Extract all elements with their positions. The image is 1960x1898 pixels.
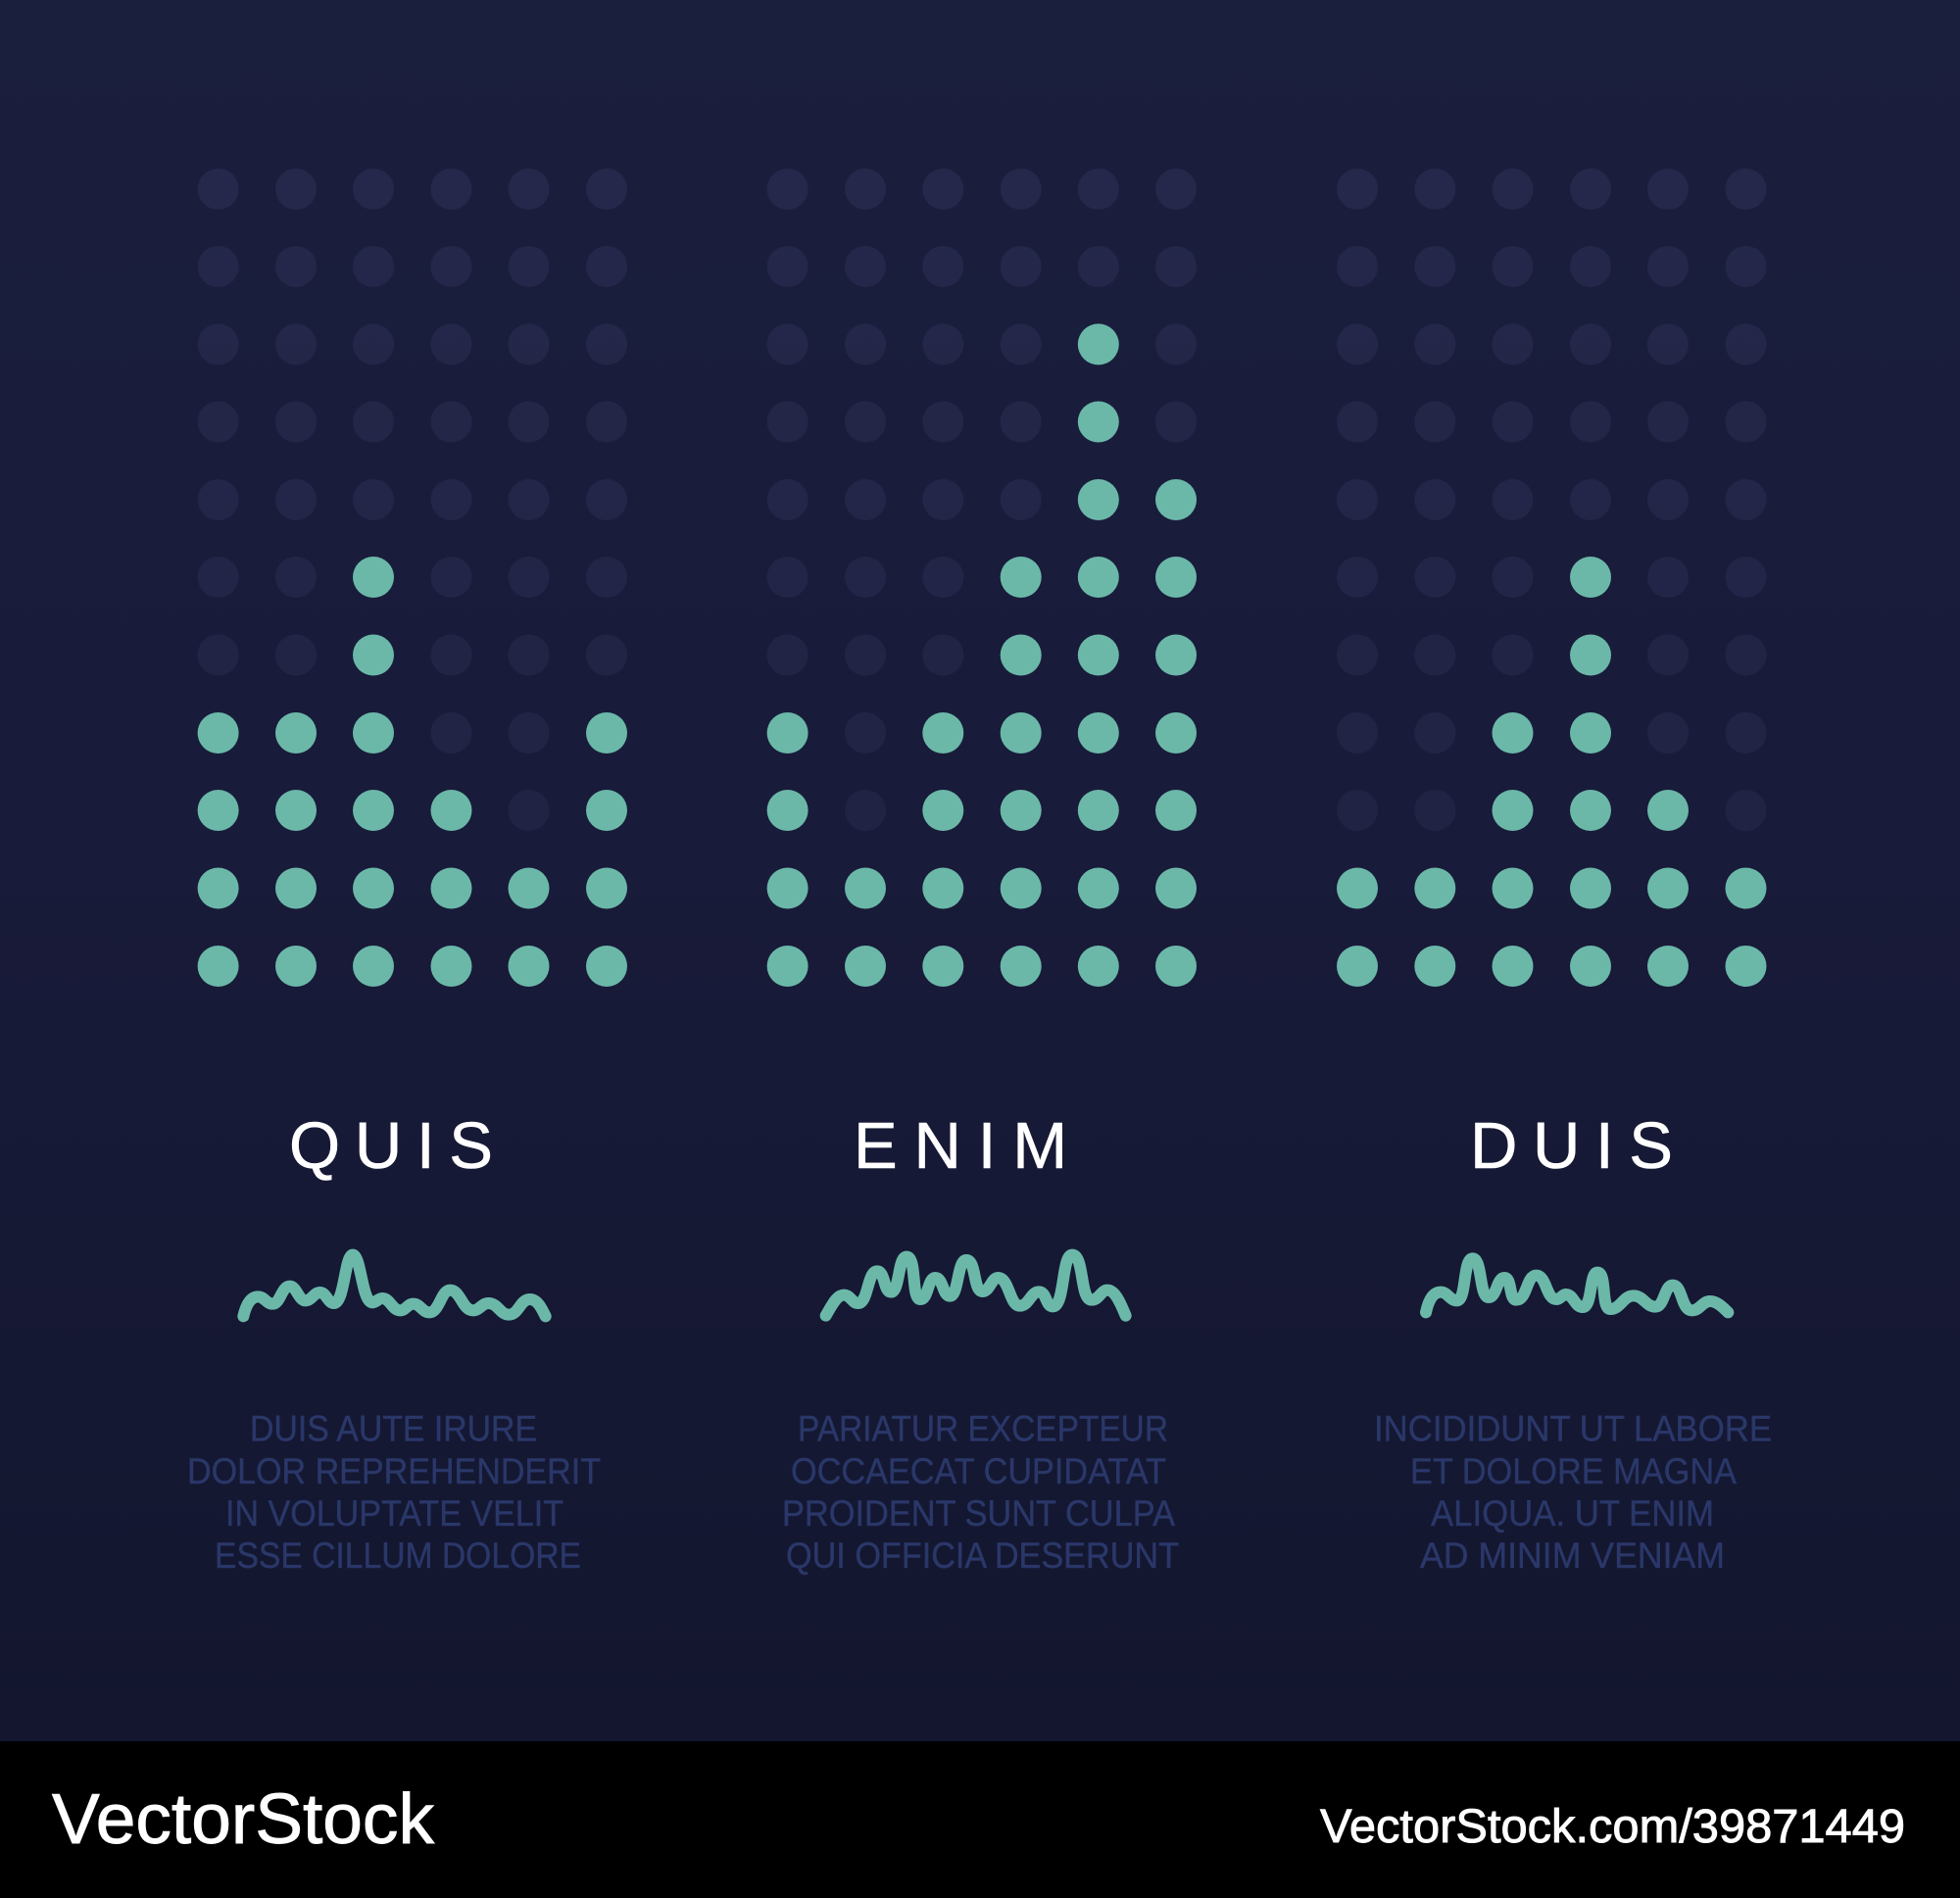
column 2 of enim: [845, 169, 886, 987]
text block: duis description: AD MINIM VENIAM: [1420, 1535, 1725, 1576]
heading: enim: ENIM: [854, 1109, 1067, 1183]
column 1 of duis: [1337, 169, 1378, 987]
footer image id: VectorStock.com/39871449: [1320, 1801, 1905, 1853]
text block: quis description: IN VOLUPTATE VELIT: [225, 1493, 564, 1533]
wave line: enim: [826, 1255, 1126, 1316]
column 5 of quis: [508, 169, 549, 987]
text block: duis description: ET DOLORE MAGNA: [1410, 1451, 1737, 1491]
text block: quis description: [187, 1409, 601, 1576]
column 1 of quis: [198, 169, 239, 987]
footer logo text: VectorStock: [52, 1780, 435, 1859]
column 4 of duis: [1570, 169, 1611, 987]
column 6 of duis: [1725, 169, 1766, 987]
panel: duis dot chart: [1337, 169, 1766, 987]
panel: enim dot chart: [767, 169, 1197, 987]
heading: quis: QUIS: [289, 1109, 493, 1183]
column 2 of quis: [275, 169, 317, 987]
column 3 of duis: [1492, 169, 1533, 987]
text block: duis description: ALIQUA. UT ENIM: [1431, 1493, 1714, 1533]
column 6 of enim: [1155, 169, 1197, 987]
footer bar: [0, 1741, 1960, 1898]
text block: enim description: OCCAECAT CUPIDATAT: [791, 1451, 1166, 1491]
text block: enim description: PROIDENT SUNT CULPA: [782, 1493, 1175, 1533]
column 5 of enim: [1078, 169, 1119, 987]
heading: duis: DUIS: [1470, 1109, 1673, 1183]
column 4 of quis: [431, 169, 472, 987]
wave line: quis: [243, 1255, 546, 1316]
text block: quis description: ESSE CILLUM DOLORE: [215, 1535, 581, 1576]
column 6 of quis: [586, 169, 627, 987]
column 2 of duis: [1414, 169, 1455, 987]
text block: duis description: [1374, 1409, 1772, 1576]
text block: quis description: DUIS AUTE IRURE: [250, 1409, 537, 1448]
wave line: duis: [1426, 1258, 1728, 1312]
column 4 of enim: [1001, 169, 1042, 987]
column 3 of quis: [353, 169, 394, 987]
text block: enim description: PARIATUR EXCEPTEUR: [798, 1409, 1168, 1448]
column 5 of duis: [1647, 169, 1689, 987]
text block: quis description: DOLOR REPREHENDERIT: [187, 1451, 601, 1491]
text block: enim description: QUI OFFICIA DESERUNT: [786, 1535, 1179, 1576]
panel: quis dot chart: [198, 169, 627, 987]
text block: duis description: INCIDIDUNT UT LABORE: [1374, 1409, 1772, 1448]
text block: enim description: [782, 1409, 1179, 1576]
column 1 of enim: [767, 169, 808, 987]
column 3 of enim: [922, 169, 963, 987]
